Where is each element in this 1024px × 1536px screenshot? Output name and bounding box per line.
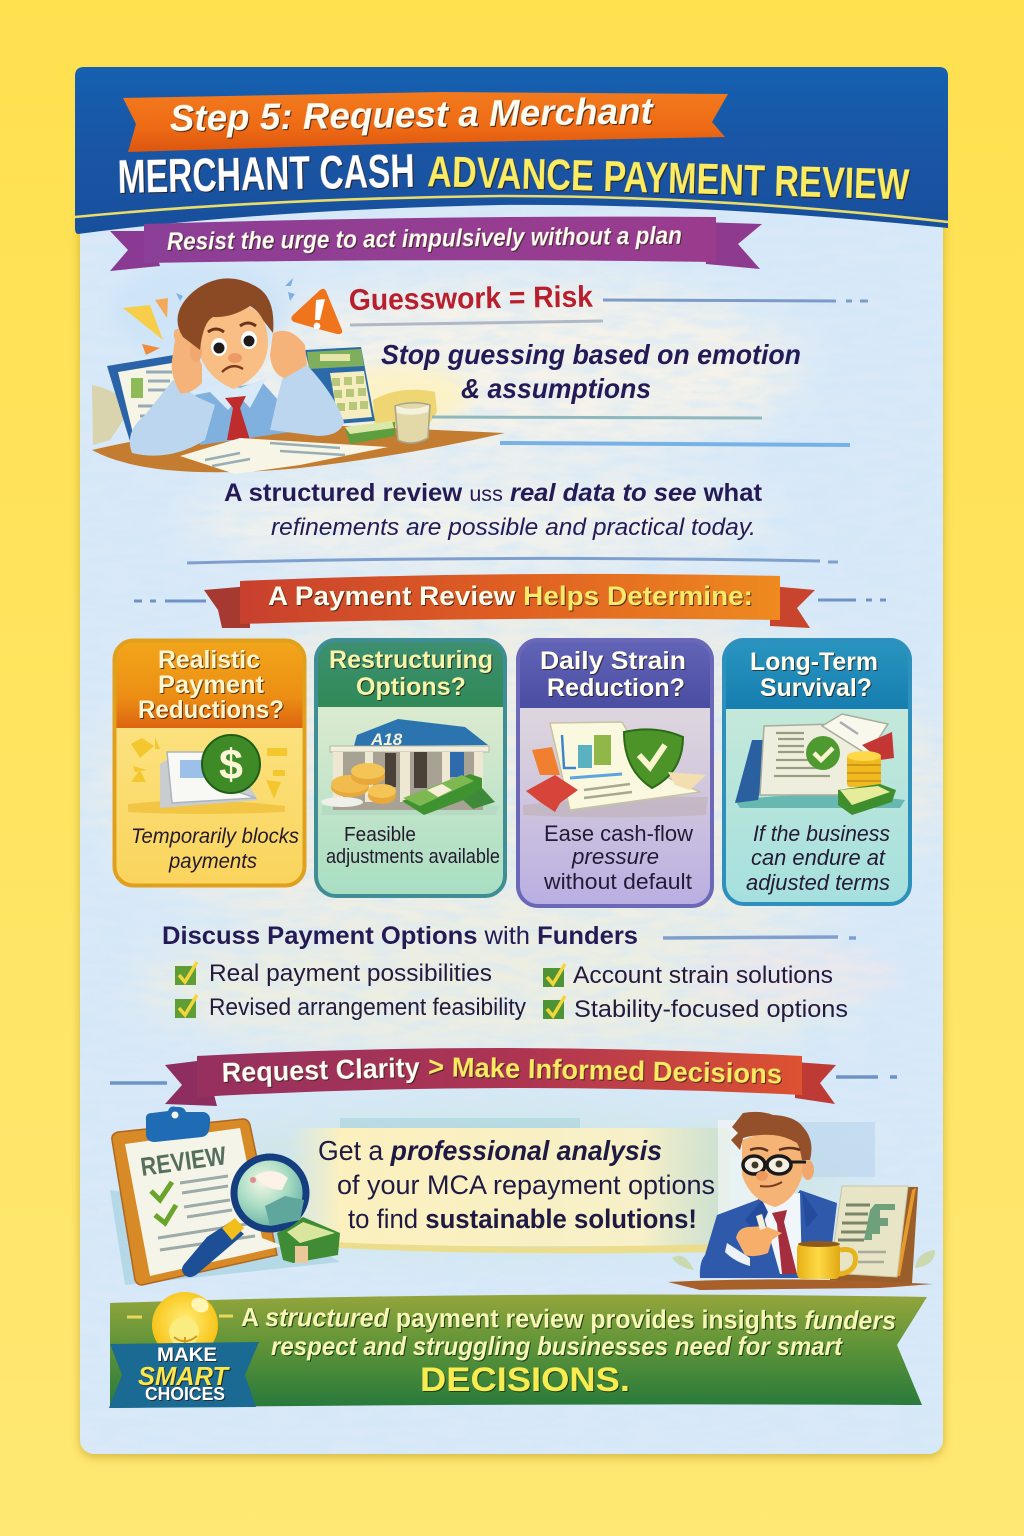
card 2 text: adjustments available xyxy=(326,846,500,868)
panel: card 2 restructuring options xyxy=(314,638,507,898)
main title: MERCHANT CASH xyxy=(117,144,415,203)
card 3 text xyxy=(543,821,693,894)
card 2 heading xyxy=(329,646,493,701)
card 4 heading xyxy=(750,648,878,702)
icon: check 1 xyxy=(175,962,197,985)
illustration: stressed man at desk xyxy=(92,278,505,474)
heading: Guesswork = Risk xyxy=(349,281,868,325)
text block: stop guessing xyxy=(381,339,801,404)
bottom green banner xyxy=(110,1295,927,1408)
card 3 text: pressure xyxy=(571,844,659,869)
bottom green banner: respect and struggling businesses need for smart xyxy=(271,1331,843,1361)
card 4 text: If the business xyxy=(753,821,890,846)
section ribbon: A Payment Review Helps Determine xyxy=(134,574,886,628)
card 1 text: Temporarily blocks xyxy=(131,825,299,848)
subtitle ribbon xyxy=(110,217,762,271)
decorative lines xyxy=(432,417,762,418)
text block: structured review xyxy=(224,479,763,541)
badge: make smart choices: SMART xyxy=(138,1361,230,1391)
text block: stop guessing: Stop guessing based on emotion xyxy=(381,339,801,370)
card 3 heading: Daily Strain xyxy=(540,647,686,675)
card 2 text xyxy=(326,824,500,868)
card 4 heading: Long-Term xyxy=(750,648,878,676)
icon: bank with coins and cash xyxy=(321,719,500,815)
section ribbon: A Payment Review Helps Determine: A Payment Review Helps Determine: xyxy=(268,581,753,611)
badge: make smart choices: MAKE xyxy=(157,1345,217,1366)
icon: check 2 xyxy=(175,995,197,1018)
illustration: review clipboard with magnifier and cash xyxy=(110,1106,340,1285)
panel: card 1 realistic payment reductions xyxy=(113,639,306,887)
badge: make smart choices: CHOICES xyxy=(145,1384,225,1404)
text panel: professional analysis: to find sustainable solutions! xyxy=(348,1204,697,1234)
illustration: advisor with glasses, book and mug xyxy=(668,1112,935,1290)
card 1 heading: Reductions? xyxy=(138,696,284,724)
card 1 heading: Payment xyxy=(158,671,265,699)
section ribbon: request clarity: Request Clarity xyxy=(221,1052,420,1088)
section ribbon: request clarity: > Make Informed Decisions xyxy=(428,1051,782,1089)
card 3 heading: Reduction? xyxy=(547,674,685,702)
icon: book and dollar coin: $ xyxy=(219,741,243,789)
card 4 text xyxy=(746,821,890,895)
icon: warning triangle xyxy=(291,289,342,334)
bottom green banner: DECISIONS. xyxy=(420,1361,630,1399)
panel: card 3 daily strain reduction xyxy=(516,638,714,908)
card 2 heading: Options? xyxy=(356,673,466,701)
icon: bank with coins and cash: A18 xyxy=(370,730,403,749)
card 3 heading xyxy=(540,647,686,702)
card 4 text: can endure at xyxy=(751,845,886,870)
title ribbon: Step 5 xyxy=(123,90,728,152)
section ribbon: request clarity xyxy=(110,1048,897,1106)
card 3 text: Ease cash-flow xyxy=(544,821,693,846)
text block: stop guessing: & assumptions xyxy=(461,373,651,404)
badge: make smart choices xyxy=(109,1342,259,1408)
text block: structured review: A structured review uss real data to see what xyxy=(224,479,763,507)
checklist xyxy=(175,960,848,1023)
panel: main card body xyxy=(80,200,943,1454)
text block: structured review: refinements are possible and practical today. xyxy=(271,514,756,541)
header band xyxy=(75,67,948,234)
icon: chart document and shield xyxy=(523,722,708,818)
card 4 heading: Survival? xyxy=(760,674,872,702)
title ribbon: Step 5: Step 5: Request a Merchant xyxy=(169,90,655,139)
card 1 heading xyxy=(138,646,284,724)
main title xyxy=(117,144,910,209)
card 1 heading: Realistic xyxy=(158,646,260,674)
heading: Guesswork = Risk: Guesswork = Risk xyxy=(349,281,593,317)
icon: documents, coins and cash xyxy=(735,714,905,815)
icon: book and dollar coin xyxy=(128,735,287,814)
card 1 text: payments xyxy=(168,850,257,873)
checklist text: Stability-focused options xyxy=(574,996,848,1023)
checklist text: Account strain solutions xyxy=(573,962,833,989)
heading: discuss payment options: Discuss Payment Options with Funders xyxy=(162,922,638,950)
text panel: professional analysis: of your MCA repayment options xyxy=(337,1170,715,1200)
text panel: professional analysis xyxy=(288,1118,875,1253)
icon: check 4 xyxy=(543,996,565,1019)
card 3 text: without default xyxy=(543,869,692,894)
bottom green banner: A structured payment review provides insights funders xyxy=(241,1302,896,1335)
checklist text xyxy=(209,960,848,1023)
illustration: review clipboard with magnifier and cash: REVIEW xyxy=(139,1140,228,1182)
subtitle ribbon: Resist the urge to act impulsively without a plan xyxy=(167,222,682,256)
panel: card 4 long-term survival xyxy=(722,638,912,906)
icon: check 3 xyxy=(543,964,565,987)
card 1 text xyxy=(131,825,299,873)
checklist text: Revised arrangement feasibility xyxy=(209,994,526,1021)
card 2 heading: Restructuring xyxy=(329,646,493,674)
decorative line xyxy=(187,558,838,563)
icon: light bulb xyxy=(127,1292,233,1358)
text panel: professional analysis: Get a professional analysis xyxy=(318,1135,662,1166)
checklist text: Real payment possibilities xyxy=(209,960,492,987)
card 4 text: adjusted terms xyxy=(746,870,890,895)
card 2 text: Feasible xyxy=(344,824,416,846)
